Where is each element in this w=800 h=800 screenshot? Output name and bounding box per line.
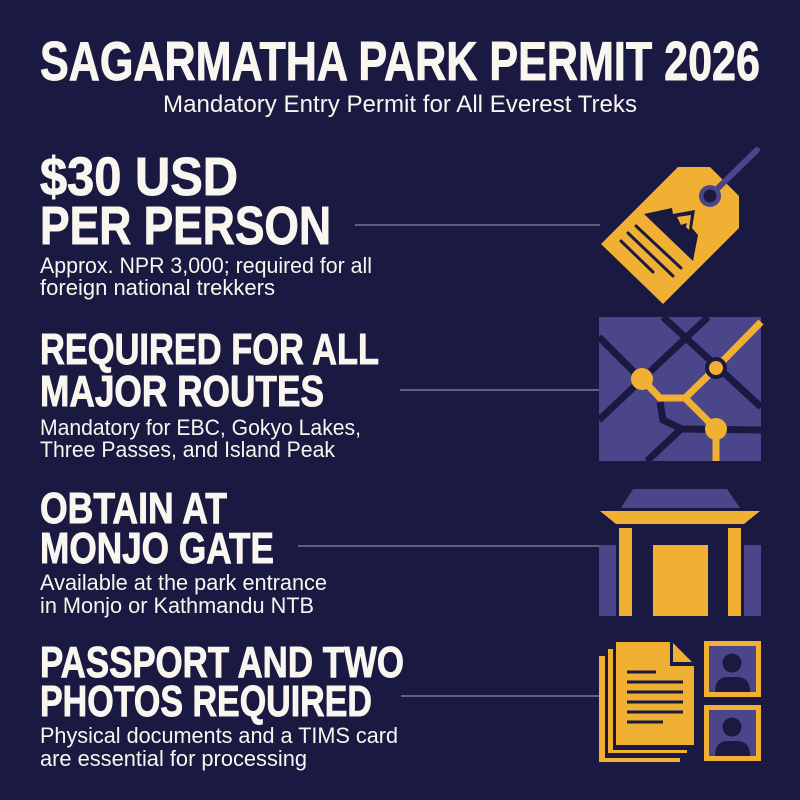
text: price detail: Approx. NPR 3,000; required for all xyxy=(40,253,372,278)
heading: documents: PHOTOS REQUIRED xyxy=(40,678,372,726)
text: routes detail: Mandatory for EBC, Gokyo Lakes, xyxy=(40,415,361,440)
icon: passport photo bottom xyxy=(704,705,761,761)
panel: routes xyxy=(40,317,761,462)
icon: passport photo top xyxy=(704,641,761,697)
heading: routes xyxy=(40,326,379,416)
icon: price tag xyxy=(601,150,757,304)
icon: document stack xyxy=(599,642,694,762)
heading: documents xyxy=(40,639,404,726)
heading: routes: REQUIRED FOR ALL xyxy=(40,326,379,374)
text: gate detail: Available at the park entrance xyxy=(40,570,327,595)
heading: gate xyxy=(40,485,274,573)
heading: price xyxy=(40,148,331,256)
text: documents detail: are essential for processing xyxy=(40,746,307,771)
panel: gate xyxy=(40,485,761,618)
text: routes detail: Three Passes, and Island Peak xyxy=(40,437,336,462)
panel: price xyxy=(40,148,757,304)
heading: routes: MAJOR ROUTES xyxy=(40,368,324,416)
icon: route map xyxy=(599,317,761,461)
panel: documents xyxy=(40,639,761,771)
heading: gate: MONJO GATE xyxy=(40,525,274,573)
text: documents detail xyxy=(40,723,398,771)
icon: park gate xyxy=(599,489,761,616)
heading: price: PER PERSON xyxy=(40,197,331,256)
text: price detail xyxy=(40,253,372,300)
text: price detail: foreign national trekkers xyxy=(40,275,275,300)
text: gate detail xyxy=(40,570,327,618)
text: gate detail: in Monjo or Kathmandu NTB xyxy=(40,593,314,618)
heading: price: $30 USD xyxy=(40,148,238,207)
heading: gate: OBTAIN AT xyxy=(40,485,227,533)
heading: documents: PASSPORT AND TWO xyxy=(40,639,404,687)
text: documents detail: Physical documents and a TIMS card xyxy=(40,723,398,748)
text: routes detail xyxy=(40,415,361,462)
subtitle: Mandatory Entry Permit for All Everest Treks xyxy=(163,91,637,118)
